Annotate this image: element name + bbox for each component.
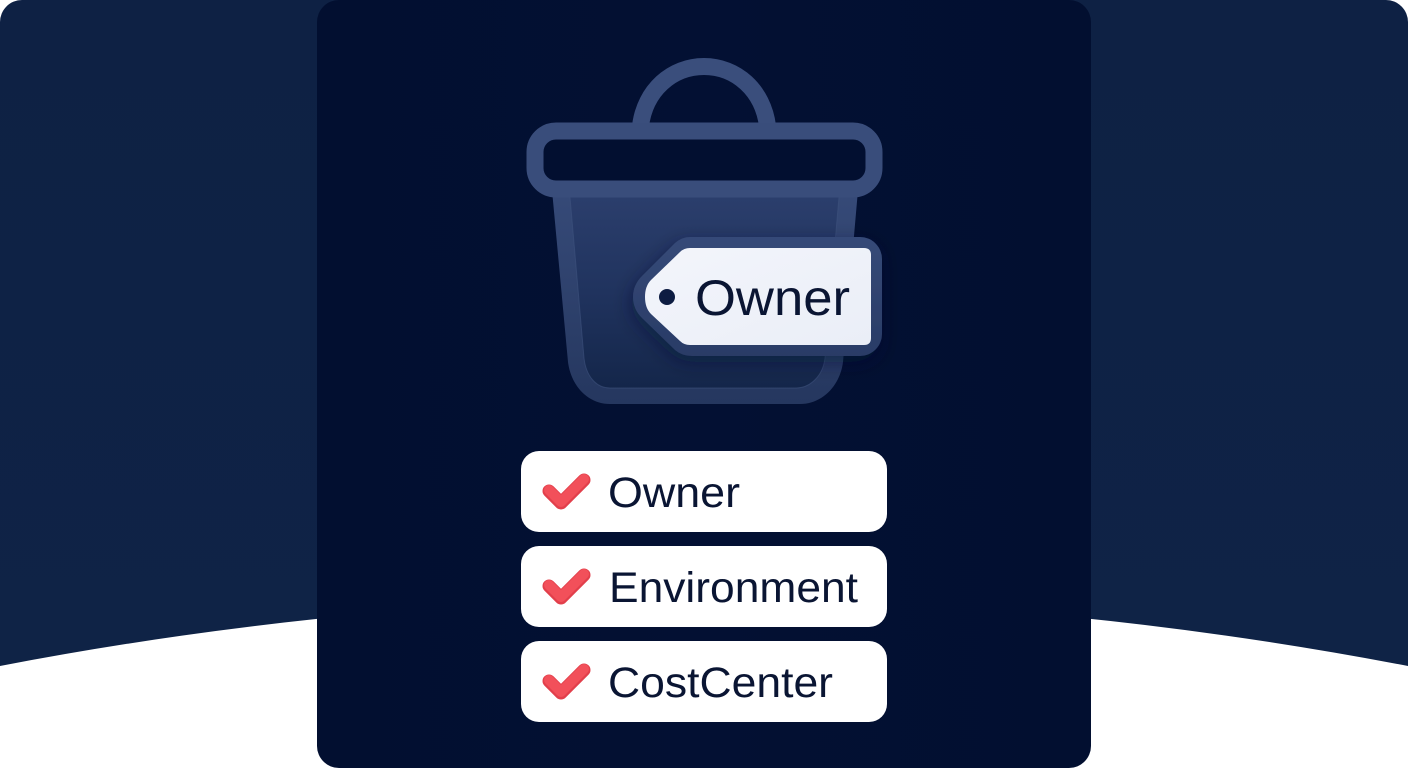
panel: central dark card — [317, 0, 1091, 768]
bucket handle — [640, 66, 768, 126]
tag label: Owner — [695, 270, 850, 326]
bucket rim — [535, 131, 874, 189]
checklist — [521, 451, 887, 722]
checklist row: CostCenter: CostCenter — [608, 659, 833, 707]
checklist row: Owner — [521, 451, 887, 532]
tag hole — [659, 289, 675, 305]
checklist row: Owner: Owner — [608, 469, 740, 517]
bucket inner face — [570, 197, 839, 388]
bucket body — [552, 190, 858, 404]
checklist row: CostCenter — [521, 641, 887, 722]
tag white face — [645, 248, 871, 345]
icon: storage bucket with tag — [535, 66, 882, 404]
checklist row: Environment: Environment — [609, 564, 858, 612]
checklist row: Environment — [521, 546, 887, 627]
tag outer border — [633, 237, 882, 356]
